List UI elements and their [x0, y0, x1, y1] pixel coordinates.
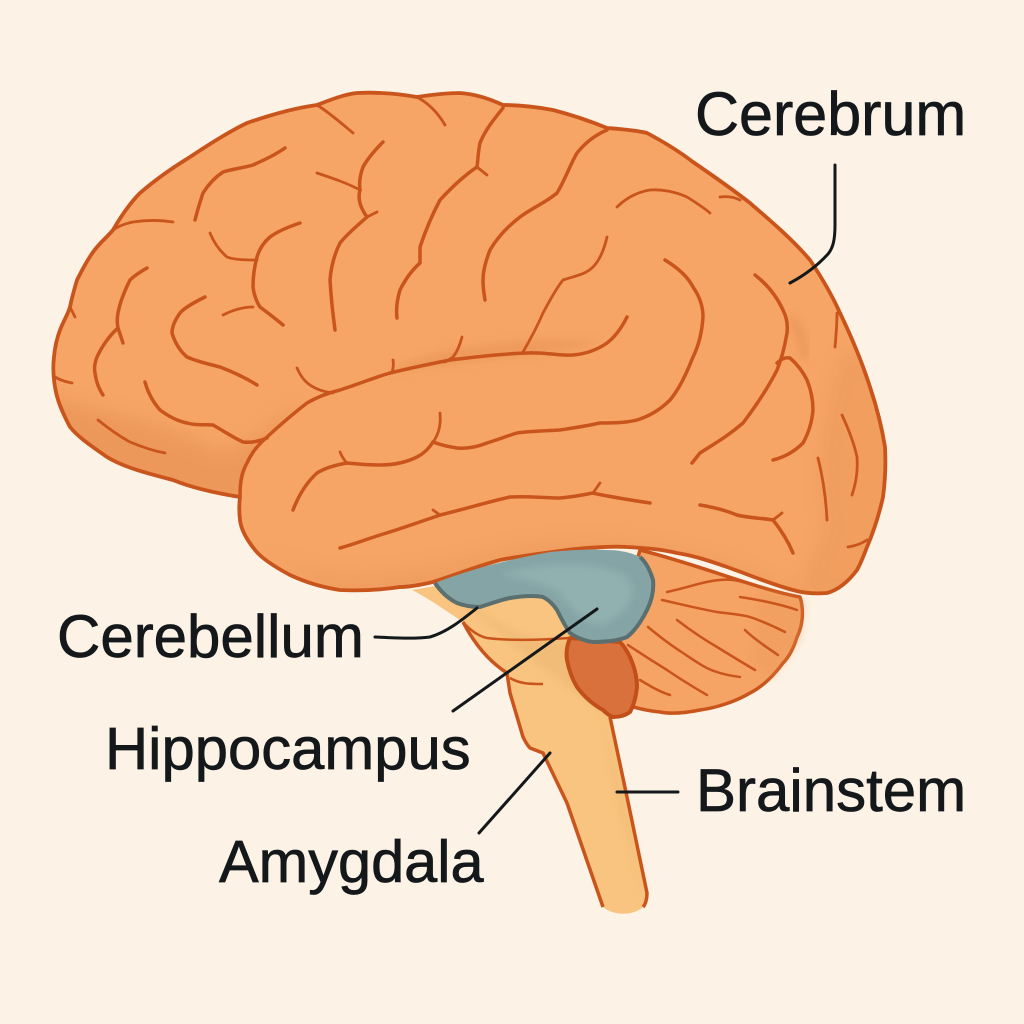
label: Cerebellum: Cerebellum — [57, 603, 364, 670]
leader: Cerebrum — [790, 165, 835, 283]
label: Cerebrum: Cerebrum — [695, 80, 966, 148]
leader lines — [375, 165, 835, 833]
brain diagram — [51, 90, 962, 914]
label: Brainstem: Brainstem — [696, 757, 966, 824]
label: Amygdala: Amygdala — [219, 828, 484, 895]
cerebrum shading — [40, 318, 900, 605]
leader: Amygdala — [479, 753, 550, 833]
leader: Brainstem — [617, 790, 678, 794]
leader: Hippocampus — [453, 609, 597, 711]
label: Hippocampus: Hippocampus — [105, 715, 471, 782]
cerebrum — [40, 93, 900, 605]
hippocampus — [435, 550, 653, 642]
cerebellum — [615, 550, 805, 713]
leader: Cerebellum — [375, 608, 477, 638]
brainstem — [412, 584, 647, 914]
amygdala — [567, 638, 637, 717]
cerebrum folds — [53, 93, 885, 593]
